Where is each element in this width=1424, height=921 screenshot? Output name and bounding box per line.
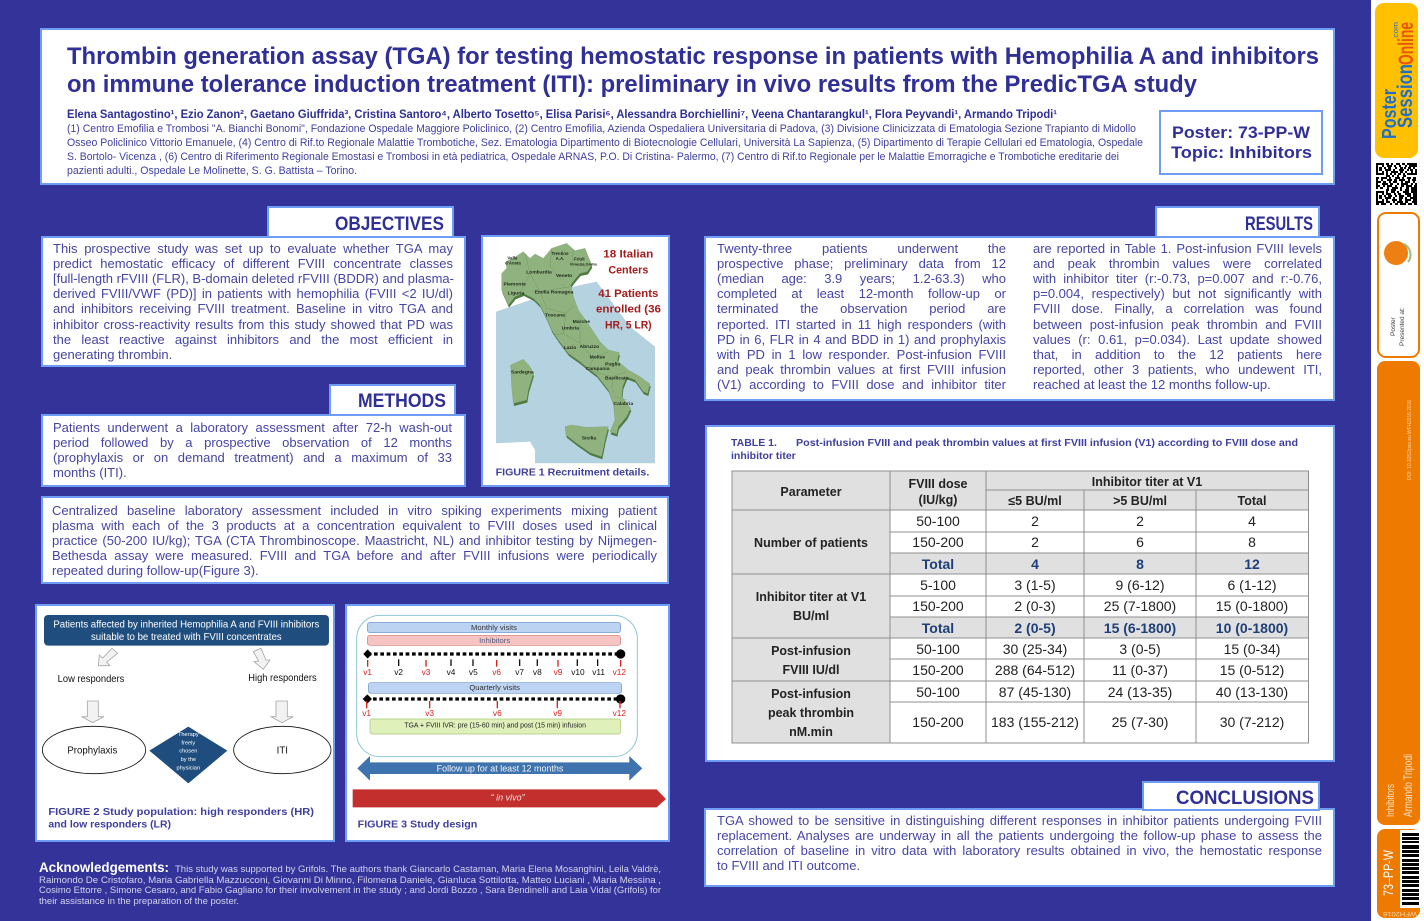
table values: 25 (7-30) — [1112, 714, 1168, 730]
diamond: therapy choice: freely — [181, 740, 195, 746]
logo: PosterSessionOnline: Session — [1394, 64, 1417, 128]
flow header box: Patients affected by inherited Hemophilia A and FVIII inhibitors — [53, 619, 319, 630]
objectives body — [53, 240, 454, 362]
table totals: 15 (6-1800) — [1104, 620, 1176, 636]
table values: 40 (13-130) — [1216, 684, 1288, 700]
table headers: FVIII dose — [908, 477, 968, 491]
methods body: period followed by a prospective observation of 12 months — [53, 435, 452, 450]
results column 2: values (r: 0.61, p=0.034). Last update showed — [1033, 332, 1322, 347]
diamond: therapy choice: physician — [177, 766, 200, 772]
table totals: 12 — [1244, 556, 1260, 572]
map: region labels: Toscana — [545, 313, 565, 319]
table values: 150-200 — [912, 714, 964, 730]
logo: PosterSessionOnline: .com — [1393, 22, 1400, 40]
map: region labels: Puglia — [605, 362, 620, 368]
acknowledgements: Acknowledgements: — [39, 859, 169, 875]
poster number box: Poster: 73-PP-W — [1172, 124, 1310, 142]
timeline: monthly: v10 — [571, 667, 585, 677]
timeline: quarterly: v12 — [613, 708, 626, 718]
table values: 24 (13-35) — [1108, 684, 1172, 700]
conclusions body: TGA showed to be sensitive in distinguishing different responses in inhibitor patients undergoing FVIII — [717, 812, 1322, 828]
panel: centralized assessment text — [41, 496, 669, 584]
table values: 3 (0-5) — [1119, 641, 1161, 657]
responder labels: Low responders — [58, 674, 124, 685]
panel: poster code and barcode — [1377, 829, 1420, 918]
bar: TGA sampling: TGA + FVIII IVR: pre (15-60 min) and post (15 min) infusion — [404, 721, 586, 730]
panel: conclusions text — [704, 808, 1335, 887]
results column 2: FVIII dose. Finally, a correlation was found — [1033, 301, 1322, 316]
table values: 2 — [1031, 534, 1039, 550]
panel: objectives text — [41, 236, 466, 367]
map: region labels: Calabria — [613, 401, 633, 407]
table shading — [732, 471, 1308, 743]
diamond: therapy choice: chosen — [179, 749, 197, 755]
table values: 50-100 — [916, 684, 960, 700]
timeline: monthly: v12 — [613, 667, 626, 677]
table caption: inhibitor titer — [731, 450, 796, 462]
table values: 11 (0-37) — [1112, 662, 1168, 678]
diamond: therapy choice: by the — [181, 757, 196, 763]
panel: figure 1 map — [481, 235, 670, 487]
map: region labels: Lazio — [564, 345, 576, 351]
results column 2: p=0.004, respectively) but not significantly with — [1033, 286, 1322, 301]
heading: conclusions: CONCLUSIONS — [1176, 787, 1314, 809]
ellipse: ITI: ITI — [277, 745, 288, 756]
row labels: BU/ml — [793, 609, 829, 623]
timeline: monthly: v9 — [554, 667, 563, 677]
heading: methods: METHODS — [358, 390, 446, 412]
title: on immune tolerance induction treatment (ITI): preliminary in vivo results from the PredicTGA study — [67, 71, 1197, 98]
map: region labels: Marche — [573, 319, 590, 325]
panel: figure 2 study population — [35, 604, 335, 842]
methods body — [53, 420, 452, 480]
timeline: quarterly: v6 — [493, 708, 502, 718]
table caption: TABLE 1. — [731, 437, 777, 449]
arrow: in vivo: “ in vivo” — [491, 792, 526, 802]
timeline: monthly: v3 — [422, 667, 431, 677]
assessment body: practice (50-200 IU/kg); TGA (CTA Thrombinoscope. Maastricht, NL) and inhibitor testing by Nijmegen- — [52, 533, 657, 548]
assessment body — [52, 502, 657, 578]
map: Italy regions — [502, 243, 651, 459]
acknowledgements: Raimondo De Cristofaro, Maria Gabriella Mazzucconi, Giovanni Di Minno, Filomena Daniele, Gianluca Sottilotta, Matteo Luciani , Maria Messina , — [39, 875, 661, 886]
table values: 25 (7-1800) — [1104, 598, 1176, 614]
map annotation: Centers — [608, 265, 648, 277]
table values: 87 (45-130) — [999, 684, 1071, 700]
table totals — [922, 556, 1288, 636]
results column 1: (V1) according to FVIII dose and inhibitor titer — [717, 377, 1006, 392]
heading: conclusions — [1142, 781, 1320, 811]
map: region labels: Sardegna — [511, 370, 534, 376]
bar: inhibitors — [367, 635, 621, 645]
results column 1: Twenty-three patients underwent the — [717, 240, 1006, 256]
map annotation: 41 Patients — [598, 288, 658, 300]
arrow: follow up — [357, 756, 642, 781]
conclusions body: correlation of baseline in vitro data with laboratory results obtained in vivo, the hemostatic response — [717, 843, 1322, 858]
table values: 150-200 — [912, 662, 964, 678]
figure 2 caption — [48, 807, 314, 831]
map: region labels: Abruzzo — [579, 344, 599, 350]
assessment body: Bethesda assay were measured. FVIII and TGA before and after FVIII infusions were periodically — [52, 548, 657, 563]
timeline: monthly: v8 — [533, 667, 542, 677]
table headers — [780, 475, 1266, 508]
heading: objectives — [267, 206, 454, 238]
map: region labels: Piemonte — [503, 281, 526, 287]
row labels: Inhibitor titer at V1 — [756, 590, 866, 604]
map annotation: HR, 5 LR) — [605, 319, 652, 331]
figure 2 caption: and low responders (LR) — [48, 820, 171, 831]
assessment body: Centralized baseline laboratory assessment included in vitro spiking experiments mixing patient — [52, 502, 657, 518]
panel: figure 3 study design — [345, 604, 670, 842]
table totals: 4 — [1031, 556, 1039, 572]
row labels: Number of patients — [754, 536, 868, 550]
row labels: nM.min — [789, 725, 833, 739]
timeline: monthly: v4 — [447, 667, 456, 677]
results column 2: with inhibitor titer (r:-0.73, p=0.007 and r:-0.76, — [1033, 271, 1322, 286]
objectives body: This prospective study was set up to evaluate whether TGA may — [53, 240, 453, 256]
panel: orange info bar — [1377, 361, 1420, 825]
map: region labels: Trentino — [551, 251, 569, 256]
results column 2 — [1033, 240, 1322, 392]
table values: 2 — [1136, 513, 1144, 529]
timeline: monthly: v5 — [469, 667, 478, 677]
methods body: Patients underwent a laboratory assessment after 72-h wash-out — [53, 420, 452, 434]
objectives body: and inhibitors receiving FVIII treatment. Baseline in vitro TGA and — [53, 301, 453, 316]
table values — [912, 513, 1288, 730]
methods body: (prophylaxis or on demand treatment) and a maximum of 33 — [53, 450, 452, 465]
table values: 30 (25-34) — [1003, 641, 1067, 657]
map: sea — [496, 282, 655, 463]
table values: 150-200 — [912, 598, 964, 614]
map: region labels: Friuli — [574, 257, 585, 262]
row labels: peak thrombin — [768, 706, 854, 720]
timeline: quarterly — [362, 694, 626, 718]
table caption: Post-infusion FVIII and peak thrombin values at first FVIII infusion (V1) according to FVIII dose and — [796, 437, 1298, 449]
panel: methods text — [41, 414, 466, 487]
conclusions body: replacement. Analyses are underway in all the patients undergoing the follow-up phase to assess the — [717, 828, 1322, 843]
table values: 8 — [1248, 534, 1256, 550]
results column 1: prospective phase; preliminary data from 12 — [717, 256, 1006, 271]
timeline: quarterly: v3 — [425, 708, 434, 718]
timeline: monthly: v11 — [592, 667, 605, 677]
results column 1: terminated the observation period are — [717, 301, 1006, 316]
title: Thrombin generation assay (TGA) for testing hemostatic response in patients with Hemophilia A and inhibitors — [67, 43, 1319, 70]
affiliations — [67, 123, 1143, 177]
timeline: monthly: v1 — [363, 667, 372, 677]
timeline: monthly — [363, 649, 626, 677]
poster number box — [1160, 111, 1322, 174]
map: region labels: Lombardia — [526, 269, 552, 275]
affiliations: Osseo Policlinico Vittorio Emanuele, (4) Centro di Rif.to Regionale Malattie Trombotiche, Sez. Ematologia Dipartimento di Biotecnologie Cellulari, Università La Sapienza, (5) Dipartimento di Terapie Cellulari ed Ematologia, Ospedale — [67, 137, 1143, 149]
table values: 9 (6-12) — [1115, 577, 1165, 593]
acknowledgements: their assistance in the preparation of the poster. — [39, 896, 239, 907]
panel: title banner — [40, 28, 1335, 185]
timeline: quarterly: v1 — [362, 708, 371, 718]
results column 1 — [717, 240, 1006, 392]
map: region labels: Liguria — [508, 291, 525, 297]
map: region labels: Sicilia — [582, 435, 596, 441]
arrows — [82, 648, 293, 723]
map: region labels: Valle — [507, 255, 518, 260]
table values: 6 (1-12) — [1227, 577, 1277, 593]
results column 2: and peak thrombin values were correlated — [1033, 256, 1322, 271]
arrow: in vivo — [353, 789, 666, 807]
map annotation: 18 Italian — [603, 249, 653, 261]
table values: 15 (0-34) — [1224, 641, 1280, 657]
panel: table 1 — [705, 425, 1335, 762]
bar: monthly visits — [367, 622, 621, 633]
map annotation: enrolled (36 — [596, 304, 661, 316]
heading: results — [1155, 206, 1320, 238]
table totals: 2 (0-5) — [1014, 620, 1056, 636]
table totals: Total — [922, 620, 954, 636]
arrow: follow up: Follow up for at least 12 months — [437, 763, 564, 773]
figure 2 caption: FIGURE 2 Study population: high responders (HR) — [48, 807, 314, 818]
table values: 288 (64-512) — [995, 662, 1075, 678]
map: region labels: Venezia Giulia — [570, 261, 598, 266]
diamond: therapy choice: Therapy — [178, 732, 199, 738]
objectives body: predict hemostatic efficacy of different FVIII concentrate classes — [53, 256, 453, 271]
results column 1: and peak thrombin values at first FVIII infusion — [717, 362, 1006, 377]
bar: TGA sampling — [370, 719, 621, 734]
row labels: FVIII IU/dl — [783, 663, 839, 677]
table grid — [732, 471, 1308, 743]
flow header box — [44, 615, 329, 646]
panel: presented at: Presented at: — [1399, 307, 1406, 346]
responder labels — [58, 673, 317, 685]
results column 2: between post-infusion peak thrombin and FVIII — [1033, 317, 1322, 332]
poster number box: Topic: Inhibitors — [1171, 144, 1312, 162]
objectives body: inhibitor cross-reactivity results from this study showed that PD was — [53, 317, 453, 332]
bar: quarterly visits — [368, 683, 622, 693]
map: region labels: Molise — [590, 354, 605, 360]
results column 1: with PD in 1 low responder. Post-infusion FVIII — [717, 347, 1006, 362]
flow header box: suitable to be treated with FVIII concentrates — [91, 632, 282, 643]
map: region labels: Umbria — [562, 326, 579, 332]
acknowledgements: Cosimo Ettorre , Simone Cesaro, and Fabio Gagliano for their involvement in the study ; and Jordi Bozzo , Sara Bendinelli and Laia Vidal (Grifols) for — [39, 885, 661, 896]
logo: PosterSessionOnline: Online — [1395, 22, 1418, 65]
map: region labels: A.A. — [556, 256, 564, 261]
panel: results text — [704, 236, 1335, 401]
affiliations: S. Bortolo- Vicenza , (6) Centro di Riferimento Regionale Emostasi e Trombosi in età pediatrica, Ospedale ARNAS, P.O. Di Cristina- Palermo, (7) Centro di Rif.to Regionale per le Malattie Emorragiche e Trombotiche ereditarie dei — [67, 151, 1119, 163]
table values: 150-200 — [912, 534, 964, 550]
bar: inhibitors: Inhibitors — [479, 636, 510, 645]
panel: poster code and barcode: 73–PP-W — [1380, 849, 1396, 896]
affiliations: (1) Centro Emofilia e Trombosi "A. Bianchi Bonomi", Fondazione Ospedale Maggiore Policlinico, (2) Centro Emofilia, Azienda Ospedaliera Universitaria di Padova, (3) Divisione Clinicizzata di Ematologia Sezione Trapianto di Midollo — [67, 123, 1136, 135]
table values: 6 — [1136, 534, 1144, 550]
logo: PosterSessionOnline — [1375, 3, 1418, 158]
table headers: Total — [1238, 494, 1266, 508]
timeline: quarterly: v9 — [553, 708, 562, 718]
objectives body: derived FVIII/VWF (PD)] in patients with hemophilia (FVIII <2 IU/dl) — [53, 286, 453, 301]
timeline: monthly: v2 — [394, 667, 403, 677]
panel: orange info bar: Inhibitors — [1385, 784, 1397, 817]
table headers: Inhibitor titer at V1 — [1092, 475, 1202, 489]
results column 1: completed at least 12-month follow-up or — [717, 286, 1006, 301]
row labels: Post-infusion — [771, 687, 851, 701]
table headers: Parameter — [780, 485, 842, 499]
assessment body: plasma with each of the 3 products at a concentration equivalent to FVIII doses used in clinical — [52, 518, 657, 533]
affiliations: pazienti adulti., Ospedale Le Molinette, S. G. Battista – Torino. — [67, 165, 357, 177]
results column 2: that, in addition to the 12 patients here — [1033, 347, 1322, 362]
acknowledgements: This study was supported by Grifols. The authors thank Giancarlo Castaman, Maria Elena Mosanghini, Leila Valdrè, — [175, 864, 661, 875]
diamond: therapy choice — [149, 727, 227, 783]
table totals: Total — [922, 556, 954, 572]
objectives body: the least reactive against inhibitors and the most efficient in — [53, 332, 453, 347]
results column 1: (median age: 3.9 years; 1.2-63.3) who — [717, 271, 1006, 286]
map: region labels — [503, 251, 633, 441]
figure 3 caption: FIGURE 3 Study design — [358, 820, 477, 831]
table headers: ≤5 BU/ml — [1008, 494, 1062, 508]
logo: PosterSessionOnline: Poster — [1379, 89, 1401, 139]
table values: 15 (0-1800) — [1216, 598, 1288, 614]
objectives body: [full-length rFVIII (FLR), B-domain deleted rFVIII (BDDR) and plasma- — [53, 271, 454, 286]
conclusions body: to FVIII and ITI outcome. — [717, 858, 860, 873]
table headers: >5 BU/ml — [1113, 494, 1167, 508]
authors: Elena Santagostino¹, Ezio Zanon², Gaetano Giuffrida³, Cristina Santoro⁴, Alberto Tosetto⁵, Elisa Parisi⁶, Alessandra Borchiellini⁷, Veena Chantarangkul¹, Flora Peyvandi¹, Armando Tripodi¹ — [67, 109, 1057, 121]
table headers: (IU/kg) — [919, 493, 957, 507]
icon: QR code — [1376, 164, 1417, 204]
panel: poster code and barcode: WFH2016 — [1383, 910, 1417, 917]
table values: 5-100 — [920, 577, 956, 593]
title — [67, 43, 1319, 98]
results column 2: reached at least the 12 months follow-up. — [1033, 377, 1271, 392]
map: region labels: Emilia Romagna — [535, 289, 574, 295]
timeline: monthly: v6 — [492, 667, 501, 677]
panel: presented at: Poster — [1390, 316, 1397, 336]
panel: presented at — [1378, 213, 1419, 357]
results column 2: are reported in Table 1. Post-infusion FVIII levels — [1033, 240, 1322, 256]
table caption — [731, 437, 1298, 462]
acknowledgements — [39, 859, 661, 907]
ellipse: ITI — [234, 726, 331, 774]
map: region labels: Veneto — [556, 273, 572, 279]
table values: 15 (0-512) — [1220, 662, 1284, 678]
methods body: months (ITI). — [53, 465, 127, 480]
responder labels: High responders — [248, 673, 317, 684]
results column 2: reported, other 3 patients, who undewent ITI, — [1033, 362, 1322, 377]
figure 1 caption: FIGURE 1 Recruitment details. — [496, 468, 650, 479]
assessment body: repeated during follow-up(Figure 3). — [52, 563, 259, 578]
table totals: 10 (0-1800) — [1216, 620, 1288, 636]
table values: 50-100 — [916, 513, 960, 529]
row labels: Post-infusion — [771, 644, 851, 658]
panel: orange info bar: DOI: 10.3252/pso.eu.WFH2016.2016 — [1407, 400, 1413, 480]
map annotation — [596, 249, 661, 331]
sidebar — [1371, 0, 1424, 921]
row labels — [754, 536, 868, 739]
map: region labels: Campania — [586, 366, 610, 372]
ellipse: prophylaxis — [42, 726, 146, 774]
bar: quarterly visits: Quarterly visits — [469, 683, 520, 692]
timeline container — [357, 615, 637, 757]
table values: 4 — [1248, 513, 1256, 529]
results column 1: reported. ITI started in 11 high responders (with — [717, 317, 1006, 332]
timeline: monthly: v7 — [515, 667, 524, 677]
map: region labels: d'Aosta — [505, 261, 521, 266]
table values: 50-100 — [916, 641, 960, 657]
panel: orange info bar: Armando Tripodi — [1401, 754, 1415, 817]
table values: 183 (155-212) — [991, 714, 1079, 730]
ellipse: prophylaxis: Prophylaxis — [67, 745, 117, 756]
results column 1: PD in 6, FLR in 4 and BDD in 1) and prophylaxis — [717, 332, 1006, 347]
table values: 3 (1-5) — [1014, 577, 1056, 593]
map: region labels: Basilicata — [605, 375, 629, 381]
bar: monthly visits: Monthly visits — [471, 623, 517, 632]
heading: methods — [329, 384, 456, 416]
objectives body: generating thrombin. — [53, 347, 172, 362]
table values: 2 — [1031, 513, 1039, 529]
table totals: 8 — [1136, 556, 1144, 572]
conclusions body — [717, 812, 1322, 873]
table values: 2 (0-3) — [1014, 598, 1056, 614]
table values: 30 (7-212) — [1220, 714, 1284, 730]
